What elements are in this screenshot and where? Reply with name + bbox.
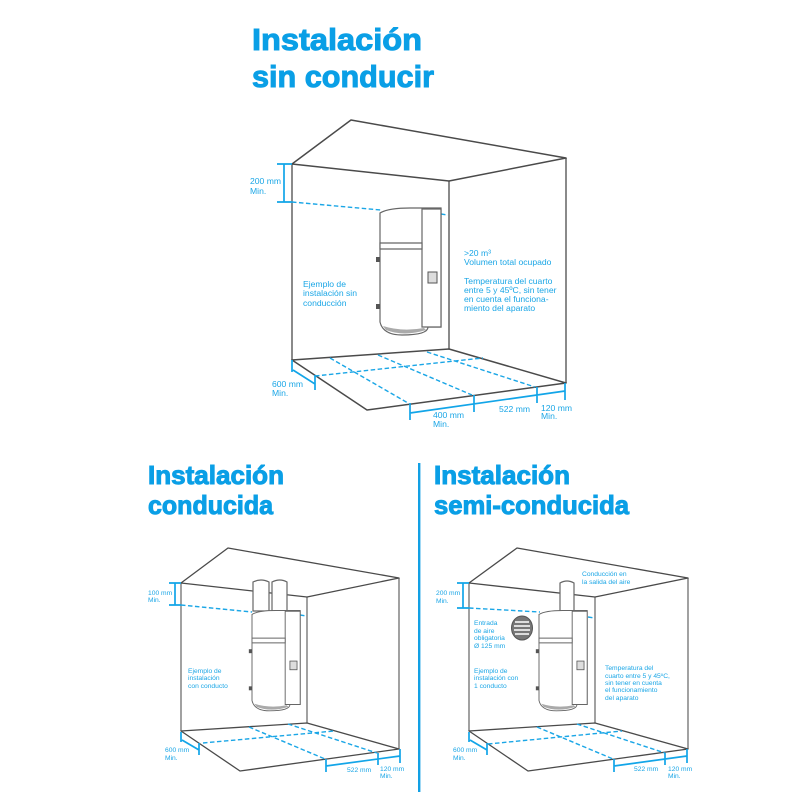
text: temperature: del aparato [605, 695, 639, 702]
label: 522 mm: 522 mm [347, 767, 372, 774]
dimension lines [457, 583, 687, 772]
floor dashed clearance lines [181, 605, 377, 759]
text: air inlet: obligatoria [474, 635, 505, 642]
dimension lines [277, 164, 565, 420]
label: 400 mm: 400 mm [433, 410, 464, 420]
label: 522 mm: 522 mm [634, 766, 659, 773]
label: 600 mm: 600 mm [165, 747, 190, 754]
title: Instalación sin conducir [252, 22, 434, 94]
text: example: con conducto [188, 683, 228, 690]
text: example: instalación [188, 675, 220, 682]
text: example: instalación sin [303, 288, 357, 298]
divider line between panels [418, 463, 420, 792]
label: 120 mm: Min. [541, 411, 557, 421]
title: Instalación semi-conducida [434, 460, 630, 520]
icon: water heater [536, 610, 587, 711]
label: 100 mm: Min. [148, 597, 161, 604]
label: 600 mm: Min. [272, 388, 288, 398]
icon: water heater [249, 610, 300, 711]
label: 120 mm: 120 mm [541, 403, 572, 413]
panel: ducted room [148, 548, 405, 780]
title: Instalación sin conducir: Instalación [252, 22, 422, 57]
panel: room without ducting [250, 120, 572, 429]
text: temperature: sin tener en cuenta [605, 680, 662, 687]
title: Instalación semi-conducida: semi-conducida [434, 490, 630, 520]
text: air outlet duct: Conducción en [582, 571, 627, 578]
text: volume and temperature: Temperatura del cuarto [464, 276, 553, 286]
text: air inlet: de aire [474, 628, 495, 635]
label: 400 mm: Min. [433, 419, 449, 429]
label: 600 mm: 600 mm [453, 747, 478, 754]
text: example: Ejemplo de [188, 668, 222, 675]
label: 120 mm: Min. [668, 773, 681, 780]
title: Instalación conducida: Instalación [148, 460, 284, 490]
label: 200 mm: Min. [436, 598, 449, 605]
text: example: conducción [303, 298, 347, 308]
label: 200 mm: 200 mm [436, 590, 461, 597]
label: 522 mm: 522 mm [499, 404, 530, 414]
dimension lines [169, 583, 400, 772]
panel: semi-ducted room [436, 548, 693, 780]
label: 600 mm: Min. [453, 755, 466, 762]
label: 120 mm: 120 mm [380, 766, 405, 773]
icon: two ducts [253, 580, 287, 611]
icon: single duct [560, 581, 574, 611]
label: 200 mm: 200 mm [250, 176, 281, 186]
text: temperature: el funcionamiento [605, 687, 658, 694]
label: 120 mm: 120 mm [668, 766, 693, 773]
label: 600 mm: 600 mm [272, 379, 303, 389]
icon: water heater [376, 208, 441, 335]
floor dashed clearance lines [292, 202, 535, 403]
label: 600 mm: Min. [165, 755, 178, 762]
title: Instalación semi-conducida: Instalación [434, 460, 570, 490]
room outline [292, 120, 566, 410]
text: volume and temperature: en cuenta el funciona- [464, 294, 549, 304]
text: example: Ejemplo de [474, 668, 508, 675]
text: temperature: cuarto entre 5 y 45ºC, [605, 673, 670, 680]
text: air inlet: Entrada [474, 620, 498, 627]
text: volume and temperature: entre 5 y 45ºC, sin tener [464, 285, 557, 295]
text: temperature: Temperatura del [605, 665, 654, 672]
text: air outlet duct: la salida del aire [582, 579, 631, 586]
title: Instalación conducida: conducida [148, 490, 274, 520]
text: example: Ejemplo de [303, 279, 346, 289]
text: example: 1 conducto [474, 683, 507, 690]
icon: air inlet grille [512, 616, 532, 640]
room outline [181, 548, 399, 771]
room outline [469, 548, 688, 771]
label: 120 mm: Min. [380, 773, 393, 780]
text: volume and temperature: >20 m³ [464, 248, 491, 258]
floor dashed clearance lines [469, 608, 665, 759]
label: 100 mm: 100 mm [148, 590, 173, 597]
text: volume and temperature: miento del aparato [464, 303, 535, 313]
label: 200 mm: Min. [250, 186, 266, 196]
text: volume and temperature: Volumen total ocupado [464, 257, 552, 267]
text: air inlet: Ø 125 mm [474, 643, 506, 650]
text: example: instalación con [474, 675, 519, 682]
title: Instalación sin conducir: sin conducir [252, 59, 434, 94]
title: Instalación conducida [148, 460, 284, 520]
